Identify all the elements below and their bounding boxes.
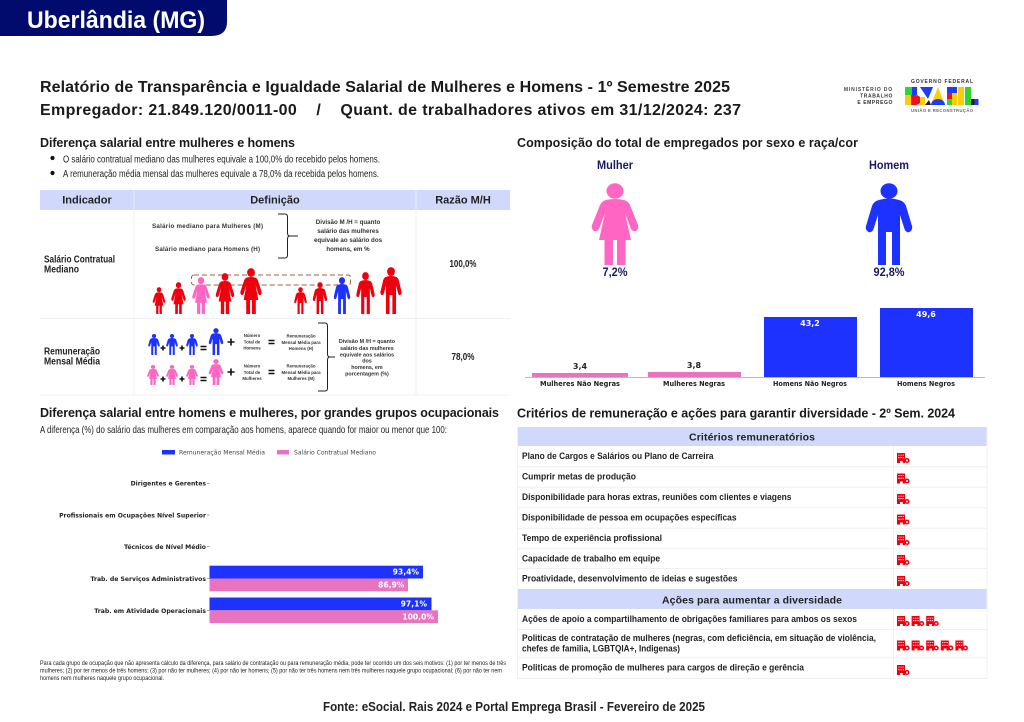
- icon: woman 7,2%: 7,2%: [602, 265, 628, 279]
- row: Remuneração Mensal Média: Mensal Média para: [281, 370, 321, 375]
- table: criteria: Critérios remuneratórios: [689, 432, 815, 444]
- bar chart: occupational groups: Técnicos de Nível Médio: [124, 543, 206, 551]
- heading: occupational groups: Diferença salarial entre homens e mulheres, por grandes grupos ocupacionais: [40, 406, 499, 420]
- logo: Ministério do Trabalho e Emprego / Governo Federal: TRABALHO: [860, 94, 893, 100]
- table: criteria: Capacidade de trabalho em equipe: [522, 554, 660, 564]
- footnote: [40, 660, 506, 682]
- row: Remuneração Mensal Média: [44, 323, 475, 391]
- row: Remuneração Mensal Média: Remuneração: [286, 364, 316, 368]
- row: Remuneração Mensal Média: salário das mulheres: [340, 346, 394, 352]
- bar chart: occupational groups: 93,4%: [393, 568, 419, 576]
- table: indicators: Definição: [250, 194, 300, 206]
- row: Remuneração Mensal Média: equivale aos salários: [340, 352, 394, 358]
- icon: woman 7,2%: Mulher: [597, 158, 633, 172]
- report title: Relatório de Transparência e Igualdade Salarial de Mulheres e Homens - 1º Semestre 2025: [40, 79, 730, 96]
- legend: Remuneração Mensal Média: [179, 450, 265, 456]
- icons: company markers: [897, 453, 967, 675]
- bar chart: sex and race: 49,6: [916, 310, 936, 319]
- footnote: Para cada grupo de ocupação que não apresenta cálculo da diferença, para salário de contratação ou para remuneração média, pode ter ocorrido um dos seis motivos: (1) por ter menos de três: [40, 660, 506, 667]
- row: Salário Contratual Mediano: [44, 214, 477, 314]
- row: Remuneração Mensal Média: homens, em: [351, 365, 383, 371]
- table: criteria: [518, 427, 987, 678]
- bar chart: occupational groups: Trab. de Serviços Administrativos: [90, 576, 206, 583]
- bar chart: occupational groups: Trab. em Atividade Operacionais: [94, 608, 206, 615]
- row: Salário Contratual Mediano: equivale ao salário dos: [314, 237, 383, 244]
- row: Salário Contratual Mediano: Salário mediano para Homens (H): [155, 246, 260, 253]
- panel: workforce composition: [517, 136, 985, 388]
- row: Remuneração Mensal Média: Mensal Média para: [281, 340, 321, 345]
- panel: occupational groups: [40, 406, 506, 682]
- logo: Ministério do Trabalho e Emprego / Governo Federal: GOVERNO FEDERAL: [911, 79, 973, 85]
- report title: Empregador: 21.849.120/0011-00 / Quant. de trabalhadores ativos em 31/12/2024: 237: [40, 102, 741, 119]
- table: criteria: Proatividade, desenvolvimento de ideias e sugestões: [522, 574, 738, 585]
- heading: salary difference: Diferença salarial entre mulheres e homens: [40, 136, 295, 150]
- row: Remuneração Mensal Média: Total de: [244, 370, 261, 375]
- row: Remuneração Mensal Média: Homens: [243, 346, 261, 350]
- bullet list: O salário contratual mediano das mulheres equivale a 100,0% do recebido pelos homens.: [63, 154, 380, 166]
- row: Salário Contratual Mediano: Divisão M /H = quanto: [316, 219, 380, 226]
- bar chart: sex and race: Homens Não Negros: [773, 379, 848, 388]
- bar chart: occupational groups: Dirigentes e Gerentes: [131, 480, 206, 488]
- bar chart: sex and race: [525, 308, 985, 388]
- bar chart: occupational groups: 97,1%: [401, 600, 427, 608]
- table: criteria: Disponibilidade para horas extras, reuniões com clientes e viagens: [522, 492, 792, 503]
- row: Salário Contratual Mediano: salário das mulheres: [317, 228, 379, 235]
- icon: woman 7,2%: [592, 158, 638, 279]
- panel: salary difference: [40, 136, 510, 395]
- subtitle: A diferença (%) do salário das mulheres em comparação aos homens, aparece quando for maior ou menor que 100:: [40, 424, 447, 436]
- table: indicators: Razão M/H: [435, 194, 491, 206]
- row: Remuneração Mensal Média: Número: [244, 333, 261, 338]
- header tab: city name: [0, 0, 227, 36]
- bar chart: sex and race: Mulheres Negras: [663, 379, 726, 388]
- bar chart: occupational groups: [59, 480, 438, 623]
- logo: Ministério do Trabalho e Emprego / Governo Federal: [844, 79, 978, 113]
- header tab: city name: Uberlândia (MG): [27, 7, 205, 34]
- row: Remuneração Mensal Média: Homens (H): [289, 346, 314, 351]
- heading: composition: Composição do total de empregados por sexo e raça/cor: [517, 136, 858, 150]
- logo: Ministério do Trabalho e Emprego / Governo Federal: MINISTÉRIO DO: [844, 85, 893, 93]
- bar chart: sex and race: Homens Negros: [897, 379, 956, 388]
- bar chart: sex and race: 3,4: [573, 362, 588, 371]
- table: indicators: [40, 190, 510, 395]
- heading: criteria: Critérios de remuneração e ações para garantir diversidade - 2º Sem. 2024: [517, 406, 955, 420]
- icon: man 92,8%: 92,8%: [874, 265, 905, 279]
- row: Remuneração Mensal Média: 78,0%: [452, 352, 475, 363]
- icon: man 92,8%: Homem: [869, 158, 909, 172]
- logo: Ministério do Trabalho e Emprego / Governo Federal: UNIÃO E RECONSTRUÇÃO: [911, 108, 974, 113]
- bar chart: occupational groups: 100,0%: [402, 612, 434, 622]
- row: Remuneração Mensal Média: Mensal Média: [44, 356, 100, 368]
- table: criteria: Ações de apoio a compartilhamento de obrigações familiares para ambos os sexos: [522, 614, 857, 625]
- logo: Ministério do Trabalho e Emprego / Governo Federal: E EMPREGO: [857, 100, 893, 106]
- table: indicators: Indicador: [62, 194, 112, 206]
- row: Remuneração Mensal Média: Mulheres (M): [287, 376, 315, 381]
- row: Remuneração Mensal Média: Divisão M /H = quanto: [339, 339, 396, 345]
- footnote: mulheres; (2) por ter menos de três homens; (3) por não ter mulheres; (4) por não ter homens; (5) por não ter três homens nem três mulheres naquele grupo ocupacional; (6) por não ter nem: [40, 668, 502, 674]
- bullet list: A remuneração média mensal das mulheres equivale a 78,0% da recebida pelos homens.: [63, 169, 379, 180]
- legend: Salário Contratual Mediano: [294, 450, 376, 456]
- row: Remuneração Mensal Média: porcentagem (%): [345, 372, 389, 378]
- bar chart: sex and race: 3,8: [687, 361, 702, 370]
- bullet list: [50, 154, 380, 180]
- row: Remuneração Mensal Média: Total de: [244, 340, 261, 344]
- panel: remuneration criteria and diversity actions: [517, 406, 987, 678]
- table: criteria: Plano de Cargos e Salários ou Plano de Carreira: [522, 451, 714, 462]
- table: criteria: Ações para aumentar a diversidade: [662, 594, 842, 606]
- table: criteria: Politicas de contratação de mulheres (negras, com deficiência, em situação de violência,: [522, 633, 876, 644]
- bar chart: occupational groups: Profissionais em Ocupações Nível Superior: [59, 512, 206, 520]
- table: criteria: Tempo de experiência profissional: [522, 533, 662, 544]
- row: Salário Contratual Mediano: Mediano: [44, 264, 79, 276]
- row: Salário Contratual Mediano: homens, em %: [326, 246, 370, 253]
- table: criteria: Disponibilidade de pessoa em ocupações específicas: [522, 512, 736, 524]
- source footer: Fonte: eSocial. Rais 2024 e Portal Emprega Brasil - Fevereiro de 2025: [323, 699, 705, 714]
- report title: [40, 79, 741, 119]
- row: Salário Contratual Mediano: Salário mediano para Mulheres (M): [152, 223, 263, 230]
- row: Salário Contratual Mediano: Salário Contratual: [44, 254, 115, 266]
- table: criteria: Politicas de promoção de mulheres para cargos de direção e gerência: [522, 663, 805, 674]
- row: Salário Contratual Mediano: 100,0%: [450, 259, 477, 270]
- table: criteria: Cumprir metas de produção: [522, 472, 636, 482]
- icon: man 92,8%: [866, 158, 912, 279]
- bar chart: sex and race: 43,2: [800, 319, 820, 328]
- table: criteria: chefes de familia, LGBTQIA+, Indigenas): [522, 644, 680, 655]
- row: Remuneração Mensal Média: Mulheres: [242, 376, 262, 381]
- row: Remuneração Mensal Média: Número: [244, 364, 261, 368]
- bar chart: occupational groups: 86,9%: [378, 580, 405, 590]
- row: Remuneração Mensal Média: Remuneração: [44, 346, 100, 358]
- row: Remuneração Mensal Média: dos: [362, 358, 372, 364]
- legend: [162, 450, 376, 456]
- footnote: homens nem mulheres naquele grupo ocupacional.: [40, 675, 164, 682]
- bar chart: sex and race: Mulheres Não Negras: [540, 379, 621, 388]
- row: Remuneração Mensal Média: Remuneração: [286, 334, 316, 338]
